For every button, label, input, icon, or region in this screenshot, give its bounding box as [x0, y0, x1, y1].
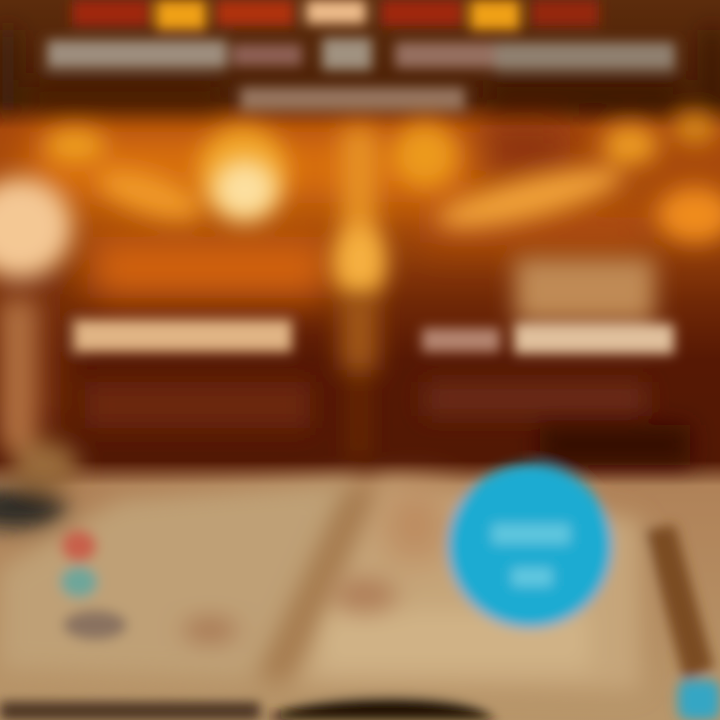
icon: red swatch — [61, 530, 97, 562]
top garland of red and gold lights — [72, 0, 599, 30]
icon: dark mark — [63, 610, 127, 640]
dark spine bottom — [268, 697, 495, 720]
icon: blue corner button — [678, 680, 720, 720]
bottom left edge — [0, 702, 260, 720]
right body text: illegible blurred lines — [425, 382, 645, 416]
left lamp glow — [0, 178, 79, 528]
glowing string lights band — [0, 125, 650, 430]
left heading: illegible blurred text — [74, 320, 292, 352]
dark shadow patch — [540, 425, 690, 465]
callout: blue circle badge — [448, 464, 612, 628]
right upper image glow — [515, 258, 655, 323]
page wash — [320, 610, 590, 670]
bright light glow centre — [213, 160, 386, 298]
dark header band — [0, 30, 720, 110]
panel: left column — [74, 320, 310, 428]
icon: teal swatch — [60, 566, 98, 598]
badge text: illegible blurred lines — [492, 524, 570, 586]
pencil at right — [645, 525, 714, 680]
legend: red and teal swatches with dark mark — [60, 530, 127, 640]
right heading: illegible blurred text — [422, 324, 674, 354]
centre divider column — [340, 295, 378, 460]
left sketch marks — [182, 616, 238, 644]
left book page — [0, 480, 360, 680]
title: illegible blurred text bands — [47, 38, 675, 111]
pink sketch marks — [333, 577, 397, 613]
spine shading — [255, 490, 375, 680]
panel: right column — [422, 258, 690, 465]
open book — [0, 480, 640, 720]
left body text: illegible blurred lines — [85, 382, 310, 428]
right book page — [290, 480, 640, 690]
warm page patch — [385, 490, 445, 560]
